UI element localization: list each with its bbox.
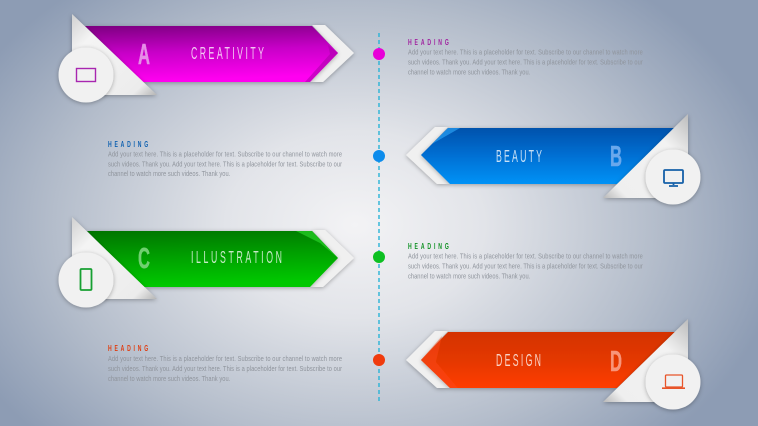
icon: smartphone — [80, 269, 92, 290]
banner C: illustration — [58, 217, 354, 308]
text block D: Add your text here. This is a placeholder for text. Subscribe to our channel to watch more — [108, 355, 342, 363]
text block D: HEADING — [108, 345, 149, 353]
banner A: creativity: CREATIVITY — [191, 43, 264, 63]
text block A: Add your text here. This is a placeholder for text. Subscribe to our channel to watch more — [408, 49, 643, 57]
timeline: dashed line with dots — [373, 33, 385, 404]
text block C: HEADING — [408, 243, 449, 251]
text block B: such videos. Thank you. Add your text here. This is a placeholder for text. Subscribe to our — [108, 161, 343, 169]
text block A: such videos. Thank you. Add your text here. This is a placeholder for text. Subscribe to our — [408, 59, 643, 67]
text block C: such videos. Thank you. Add your text here. This is a placeholder for text. Subscribe to our — [408, 263, 643, 271]
text block D: such videos. Thank you. Add your text here. This is a placeholder for text. Subscribe to our — [108, 365, 343, 373]
banner D: design: D — [610, 346, 622, 378]
banner C: illustration: ILLUSTRATION — [191, 247, 282, 267]
banner B: beauty: B — [610, 141, 622, 173]
banner C: illustration: C — [138, 243, 150, 275]
banner A: creativity — [58, 14, 354, 102]
banner B: beauty: BEAUTY — [496, 146, 542, 166]
icon: tablet — [76, 68, 96, 82]
text block D — [108, 345, 343, 383]
text block A — [408, 39, 643, 77]
text block C: channel to watch more such videos. Thank you. — [408, 273, 530, 281]
icon: laptop — [662, 375, 685, 388]
icon: desktop monitor — [664, 170, 683, 186]
text block C — [408, 243, 643, 281]
text block C: Add your text here. This is a placeholder for text. Subscribe to our channel to watch more — [408, 253, 643, 261]
text block A: HEADING — [408, 39, 449, 47]
banner B: beauty — [406, 114, 700, 204]
banner A: creativity: A — [138, 39, 150, 71]
text block B: channel to watch more such videos. Thank you. — [108, 170, 230, 178]
text block B: HEADING — [108, 141, 149, 149]
banner D: design: DESIGN — [496, 350, 541, 370]
text block A: channel to watch more such videos. Thank you. — [408, 69, 530, 77]
text block B: Add your text here. This is a placeholder for text. Subscribe to our channel to watch more — [108, 151, 342, 159]
text block B — [108, 141, 343, 178]
text block D: channel to watch more such videos. Thank you. — [108, 375, 230, 383]
banner D: design — [406, 319, 700, 410]
